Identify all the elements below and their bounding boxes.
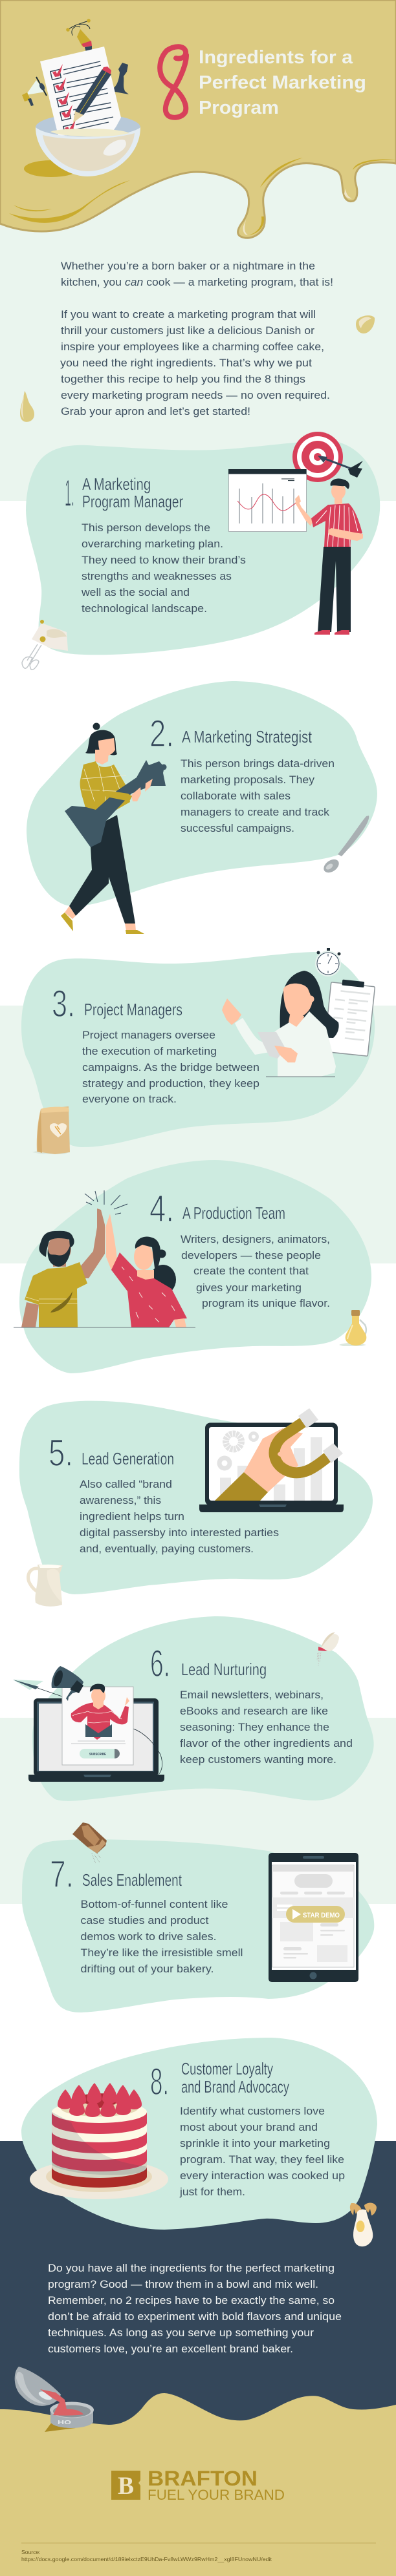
- icon: spice bowl: [317, 1632, 339, 1666]
- panel 6: lead nurturing: [13, 1616, 374, 1801]
- closing text: Do you have all the ingredients for the perfect marketing: [48, 2263, 335, 2274]
- body text: flavor of the other ingredients and: [180, 1738, 353, 1749]
- heading: [49, 1432, 174, 1474]
- megaphone: [52, 1666, 83, 1701]
- body text: developers — these people: [181, 1250, 321, 1262]
- big red number 8: [160, 47, 186, 118]
- megaphone: [22, 77, 47, 106]
- brafton logo: [111, 2467, 285, 2503]
- heading: 8.: [150, 2061, 169, 2103]
- brafton logo: BRAFTON: [148, 2467, 258, 2490]
- body text: [181, 758, 335, 834]
- intro text: If you want to create a marketing program that will: [61, 309, 316, 321]
- star demo button: STAR DEMO: [303, 1912, 340, 1919]
- body text: Bottom-of-funnel content like: [80, 1899, 228, 1910]
- body text: [81, 522, 246, 615]
- body text: Email newsletters, webinars,: [180, 1689, 324, 1701]
- panel 1: marketing program manager: [22, 432, 380, 670]
- intro text: [60, 260, 333, 417]
- star demo button: [286, 1906, 345, 1923]
- body text: just for them.: [179, 2186, 245, 2198]
- brafton logo: B: [118, 2472, 134, 2500]
- title text: Ingredients for a: [199, 47, 353, 68]
- laptop with subscribe card: SUBSCRIBE: [89, 1753, 107, 1757]
- body text: [80, 1899, 243, 1975]
- intro text: kitchen, you can cook — a marketing program, that is!: [61, 277, 333, 288]
- heading: Lead Generation: [82, 1449, 174, 1468]
- icon: cocoa bag: [72, 1822, 107, 1864]
- panel 3: project managers: [21, 948, 375, 1154]
- strawberry cake: [30, 2083, 168, 2199]
- title text: Program: [199, 98, 279, 118]
- heading: 7.: [50, 1853, 74, 1895]
- icon: cracked egg: [350, 2202, 377, 2246]
- body text: collaborate with sales: [181, 790, 291, 802]
- body text: and, eventually, paying customers.: [80, 1543, 254, 1555]
- icon: hand mixer: [22, 620, 68, 670]
- icon: spoon: [321, 816, 369, 875]
- body text: strengths and weaknesses as: [82, 571, 232, 582]
- body text: ingredient helps turn: [80, 1511, 184, 1523]
- body text: drifting out of your bakery.: [80, 1963, 214, 1975]
- body text: technological landscape.: [82, 603, 207, 615]
- intro text: every marketing program needs — no oven required.: [61, 390, 330, 401]
- intro text: thrill your customers just like a delicious Danish or: [61, 325, 315, 337]
- title text: Perfect Marketing: [199, 72, 366, 93]
- icon: bowl pouring batter into pan: HO: [58, 2420, 71, 2425]
- body text: They need to know their brand’s: [82, 554, 246, 566]
- heading: 5.: [49, 1432, 73, 1474]
- body text: overarching marketing plan.: [82, 538, 223, 550]
- heading: [149, 1188, 285, 1230]
- closing text: Remember, no 2 recipes have to be exactly the same, so: [48, 2295, 335, 2307]
- heading: [50, 1853, 182, 1895]
- panel 8: customer loyalty and brand advocacy: [21, 2038, 377, 2246]
- body text: campaigns. As the bridge between: [82, 1062, 259, 1073]
- body text: eBooks and research are like: [180, 1705, 328, 1717]
- body text: program. That way, they feel like: [180, 2154, 344, 2166]
- icon: oil bottle: [339, 1310, 366, 1346]
- body text: Project managers oversee: [82, 1029, 215, 1041]
- icon: bowl pouring batter into pan: [15, 2367, 94, 2432]
- line chart board: [228, 469, 307, 531]
- heading: Project Managers: [84, 1000, 182, 1019]
- body text: strategy and production, they keep: [82, 1078, 259, 1090]
- heading: 1.: [65, 472, 74, 514]
- intro text: Grab your apron and let’s get started!: [61, 406, 250, 417]
- icon: bowl with checklist: [22, 19, 140, 177]
- heading: [150, 2059, 289, 2103]
- heading: [150, 1643, 267, 1685]
- body text: sprinkle it into your marketing: [180, 2138, 330, 2149]
- arrow: [318, 456, 363, 478]
- blob: [22, 1839, 374, 2012]
- panel 2: marketing strategist: [27, 681, 377, 934]
- checklist paper: [40, 47, 121, 136]
- body text: create the content that: [193, 1265, 309, 1277]
- closing text: techniques. As long as you serve up something your: [48, 2327, 314, 2339]
- blob: [19, 1401, 373, 1594]
- blob: [21, 2038, 377, 2230]
- body text: everyone on track.: [82, 1093, 177, 1105]
- heading: Sales Enablement: [82, 1870, 182, 1890]
- icon: batter droplets: [20, 315, 375, 422]
- source note: Source:: [21, 2549, 40, 2555]
- laptop with magnet: [199, 1408, 344, 1512]
- blob: [19, 1160, 371, 1373]
- body text: demos work to drive sales.: [80, 1931, 216, 1943]
- body text: [181, 1234, 330, 1309]
- icon: jug: [28, 1565, 63, 1607]
- body text: gives your marketing: [196, 1282, 302, 1294]
- target: [292, 432, 343, 482]
- body text: most about your brand and: [180, 2122, 318, 2133]
- body text: This person develops the: [82, 522, 210, 534]
- intro text: Whether you’re a born baker or a nightmare in the: [61, 260, 315, 272]
- title text: [199, 47, 366, 118]
- woman with tablet: [222, 971, 339, 1077]
- person pointing: [295, 478, 363, 635]
- body text: the execution of marketing: [82, 1046, 217, 1057]
- body text: program its unique flavor.: [202, 1298, 330, 1309]
- heading: A Production Team: [182, 1203, 285, 1223]
- woman carrying chess piece: [61, 723, 167, 934]
- blob: [32, 1616, 374, 1801]
- body text: marketing proposals. They: [181, 774, 315, 786]
- body text: [179, 2106, 345, 2198]
- title: [160, 47, 366, 118]
- brafton logo: FUEL YOUR BRAND: [148, 2487, 285, 2503]
- heading: 2.: [149, 713, 174, 755]
- closing text: program? Good — throw them in a bowl and mix well.: [48, 2279, 318, 2290]
- blob: [21, 952, 375, 1147]
- body text: keep customers wanting more.: [180, 1754, 336, 1766]
- body text: every interaction was cooked up: [180, 2170, 345, 2182]
- paper plane: [13, 1680, 62, 1696]
- body text: successful campaigns.: [181, 823, 294, 834]
- heading: [52, 983, 182, 1025]
- body text: managers to create and track: [181, 807, 330, 818]
- body text: Identify what customers love: [180, 2106, 325, 2117]
- heading: [65, 472, 183, 514]
- body text: awareness,” this: [80, 1495, 161, 1506]
- body text: [80, 1479, 279, 1555]
- heading: Program Manager: [82, 492, 183, 511]
- body text: [180, 1689, 353, 1766]
- heading: A Marketing Strategist: [182, 727, 313, 746]
- body text: Writers, designers, animators,: [181, 1234, 330, 1245]
- closing text: [48, 2263, 342, 2355]
- heading: 4.: [149, 1188, 174, 1230]
- intro text: together this recipe to help you find the 8 things: [61, 374, 305, 385]
- laptop with subscribe card: [13, 1666, 164, 1782]
- pencil: [73, 67, 111, 123]
- source note: [21, 2543, 376, 2562]
- heading: A Marketing: [82, 474, 151, 494]
- body text: well as the social and: [81, 587, 190, 598]
- heading: 3.: [52, 983, 75, 1025]
- body text: This person brings data-driven: [181, 758, 335, 770]
- panel 7: sales enablement: [22, 1822, 374, 2012]
- tablet with demo page: [269, 1853, 358, 1982]
- body text: They’re like the irresistible smell: [80, 1947, 243, 1959]
- chess piece: [111, 63, 129, 94]
- heading: Lead Nurturing: [181, 1660, 267, 1679]
- body text: Also called “brand: [80, 1479, 172, 1490]
- intro text: you need the right ingredients. That’s why we put: [60, 357, 312, 369]
- blob: [27, 681, 377, 906]
- intro text: inspire your employees like a charming coffee cake,: [61, 341, 324, 353]
- closing text: don’t be afraid to experiment with bold flavors and unique: [48, 2311, 342, 2323]
- heading: Customer Loyalty: [181, 2059, 273, 2078]
- header dripping batter: [0, 0, 396, 238]
- body text: seasoning: They enhance the: [180, 1722, 329, 1733]
- high five people: [14, 1190, 195, 1327]
- clipboard: [324, 978, 375, 1056]
- clock: [315, 948, 341, 977]
- pen nib: [66, 19, 92, 52]
- closing text: customers love, you’re an excellent brand baker.: [48, 2343, 293, 2355]
- panel 5: lead generation: [19, 1401, 373, 1607]
- heading: 6.: [150, 1643, 170, 1685]
- source note: https://docs.google.com/document/d/189ielxctzE9UhDa-Fv8wLWWz9RwHm2__xgl8FUnowNU/edit: [21, 2556, 272, 2562]
- icon: flour bag: [32, 1106, 70, 1154]
- panel 4: production team: [14, 1160, 371, 1373]
- body text: [82, 1029, 259, 1105]
- footer wave: [0, 2393, 396, 2576]
- body text: case studies and product: [80, 1915, 209, 1927]
- heading: [149, 713, 313, 755]
- blob: [26, 441, 380, 655]
- body text: digital passersby into interested parties: [80, 1527, 279, 1539]
- heading: and Brand Advocacy: [181, 2077, 289, 2096]
